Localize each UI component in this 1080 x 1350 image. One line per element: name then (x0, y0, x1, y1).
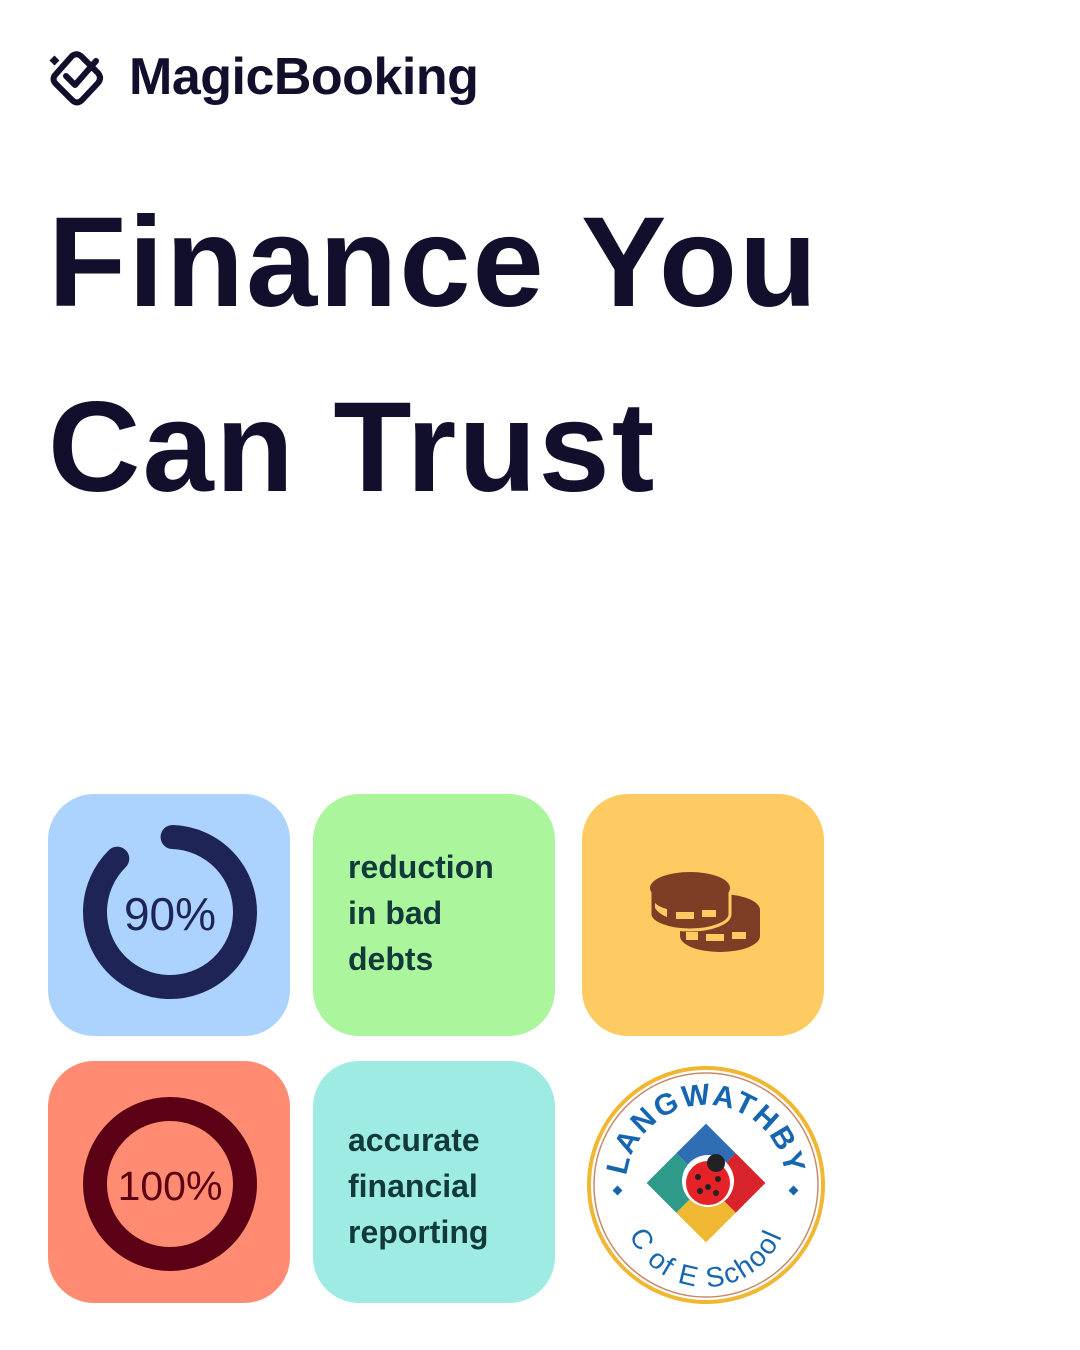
panel: reduction in bad debts: in bad (348, 895, 442, 931)
logo (50, 48, 478, 106)
icon: hands and ladybird (647, 1124, 765, 1242)
ring chart 90% (83, 825, 257, 999)
panel: accurate financial reporting (313, 1061, 555, 1303)
panel: reduction in bad debts: reduction (348, 849, 494, 885)
school badge: LANGWATHBY (606, 1084, 806, 1174)
panel: 100% (48, 1061, 290, 1303)
panel: coins (582, 794, 824, 1036)
title: Can Trust (48, 376, 656, 519)
icon: coins (650, 872, 760, 952)
ring chart 100%: 100% (118, 1163, 222, 1209)
title (48, 191, 819, 519)
school badge (587, 1066, 825, 1304)
title: Finance You (48, 191, 819, 334)
panel: 90% (48, 794, 290, 1036)
icon: logo mark (50, 51, 104, 106)
panel: accurate financial reporting: reporting (348, 1214, 488, 1250)
ring chart 90%: 90% (124, 888, 216, 940)
panel: reduction in bad debts: debts (348, 941, 433, 977)
panel: accurate financial reporting: accurate (348, 1122, 480, 1158)
school badge: C of E School (632, 1230, 782, 1287)
panel: accurate financial reporting: financial (348, 1168, 478, 1204)
ring chart 100% (83, 1097, 257, 1271)
brand name: MagicBooking (129, 48, 478, 106)
panel: reduction in bad debts (313, 794, 555, 1036)
